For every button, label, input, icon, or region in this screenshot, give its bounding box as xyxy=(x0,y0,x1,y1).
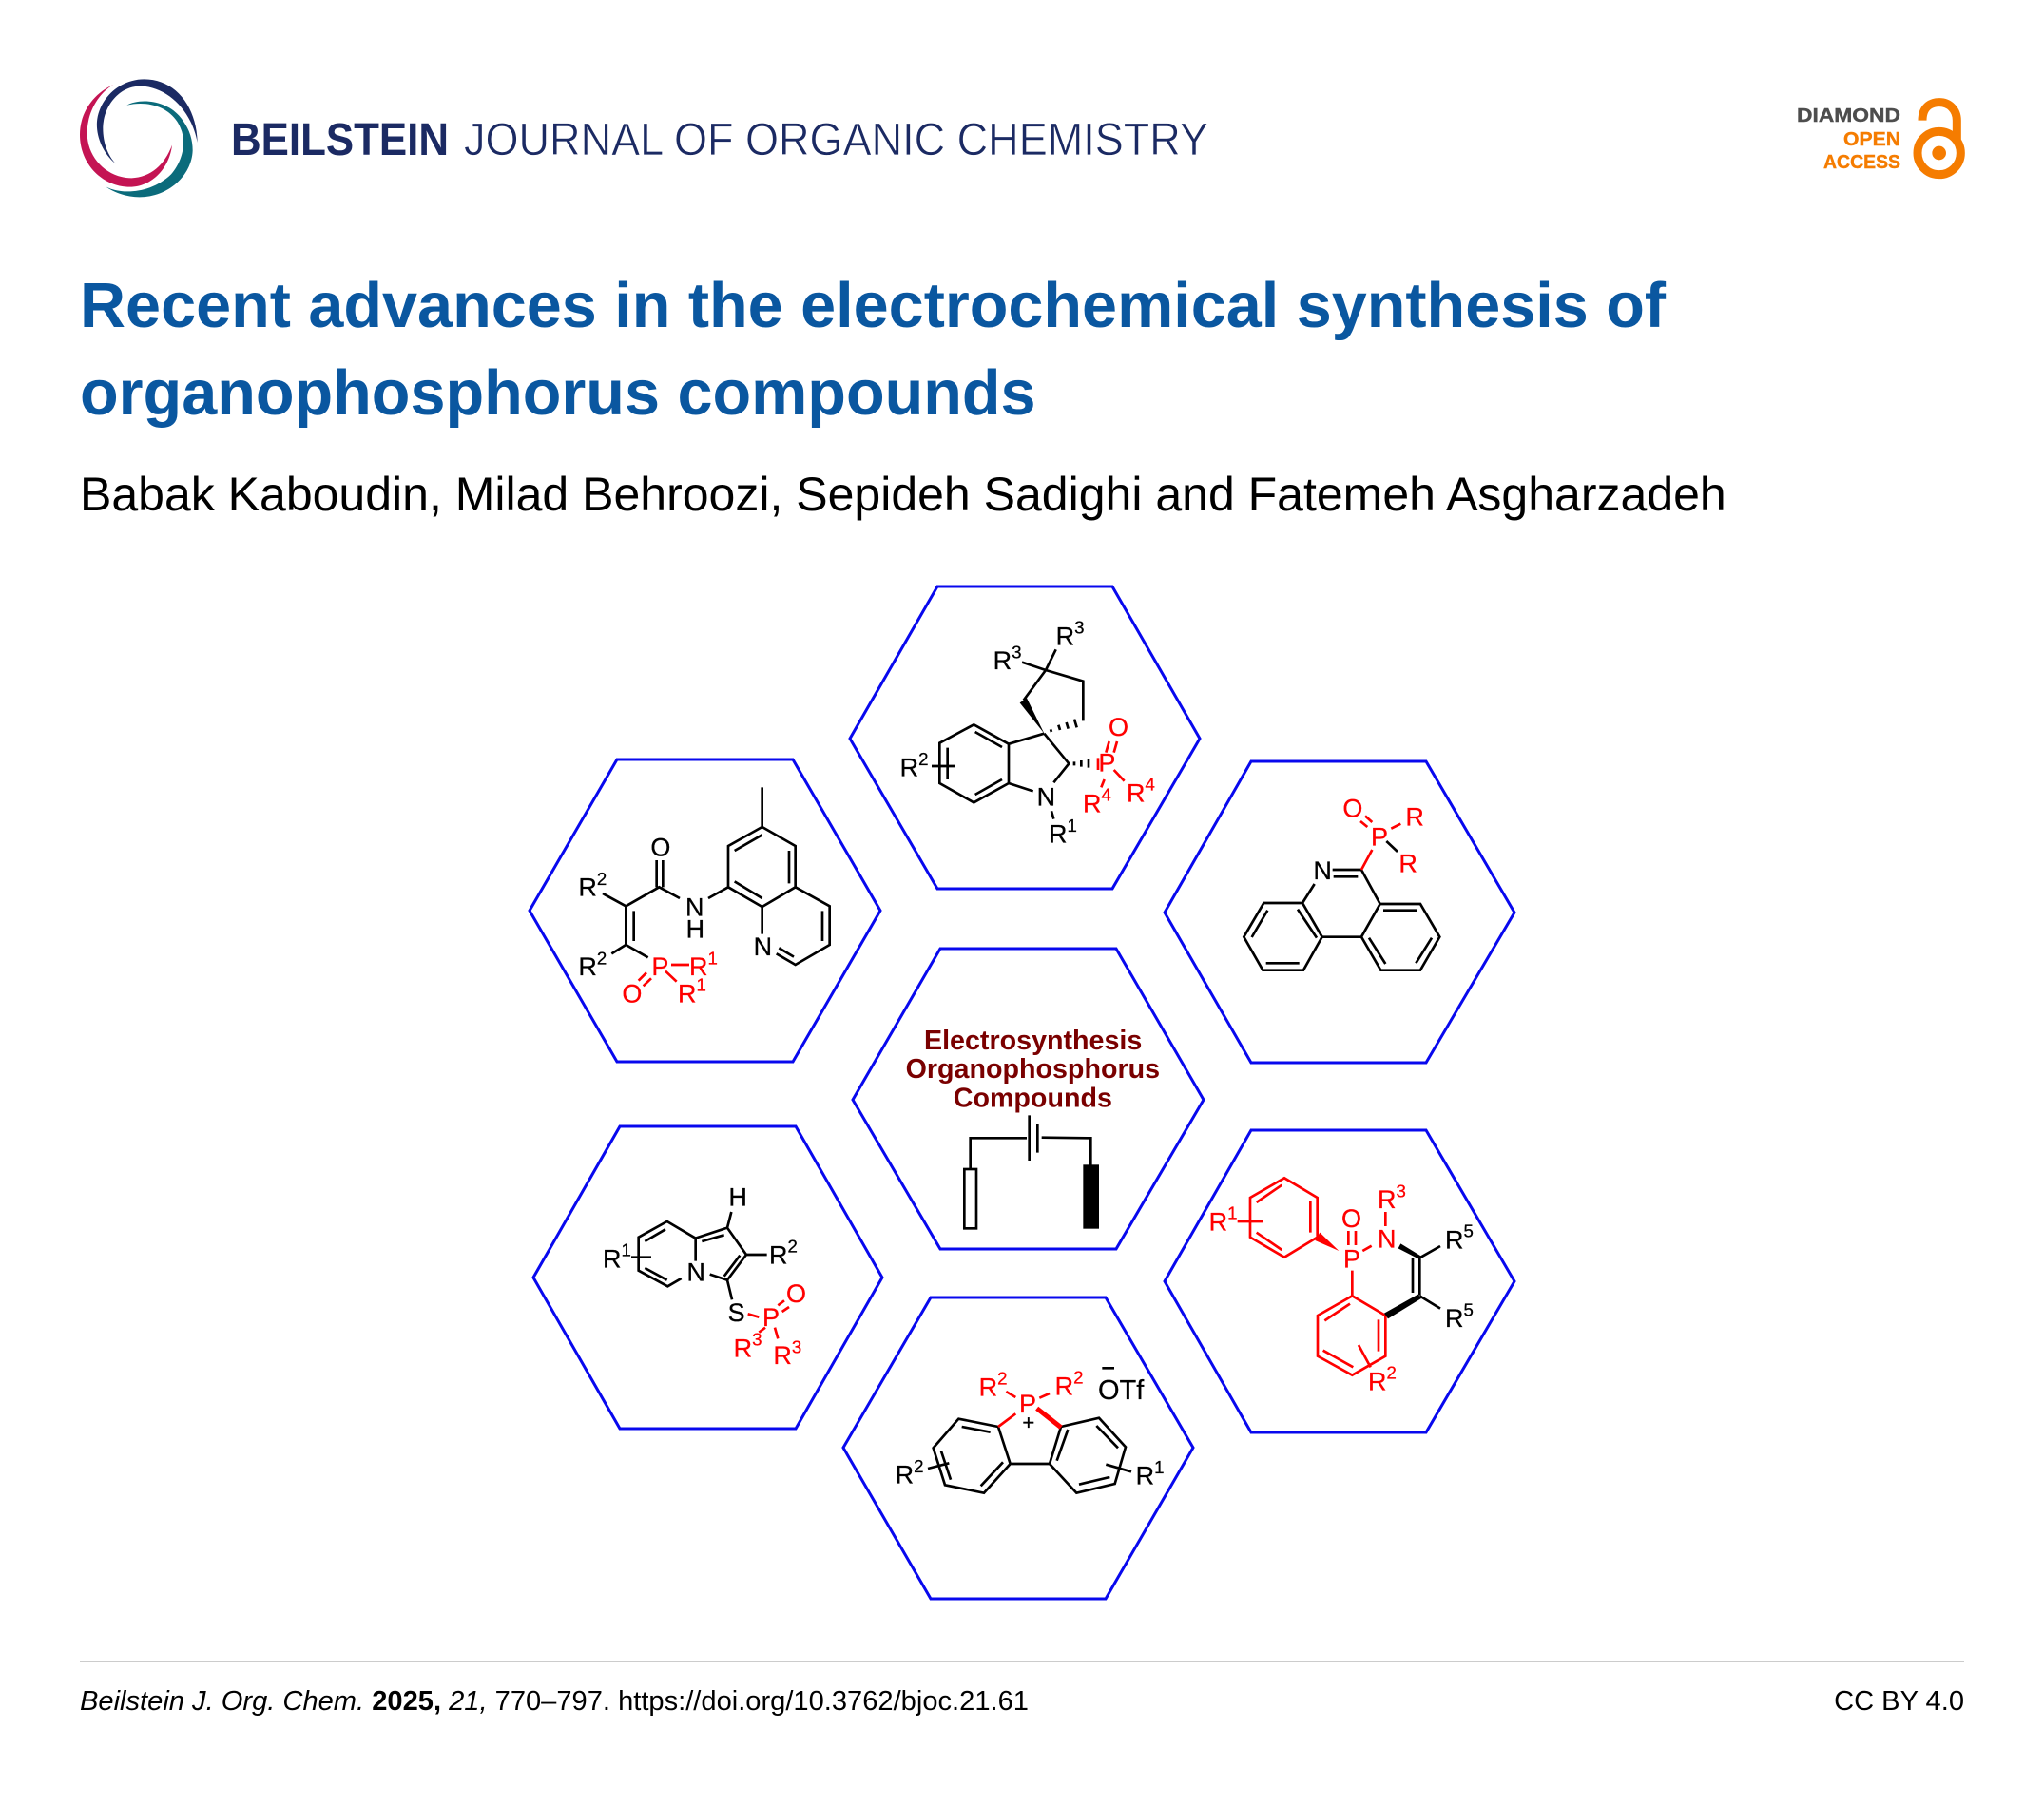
hexagon: upper right molecule xyxy=(1165,761,1514,1063)
molecule: phosphonium triflate: 2 xyxy=(997,1369,1008,1389)
molecule: phosphonium triflate: R xyxy=(979,1373,997,1401)
molecule: vinyl phosphine oxide quinoline amide: N xyxy=(685,893,704,921)
molecule: spiro indoline phosphine oxide: R xyxy=(900,754,918,782)
molecule: indolizine thiophosphate: 3 xyxy=(752,1330,762,1350)
molecule: phosphonium triflate: R xyxy=(1055,1372,1073,1400)
icon: electrolysis circuit with electrodes xyxy=(964,1115,1099,1229)
molecule: phosphaisoquinoline oxide xyxy=(1209,1178,1474,1395)
molecule: vinyl phosphine oxide quinoline amide: R xyxy=(689,952,707,981)
molecule: spiro indoline phosphine oxide: 2 xyxy=(918,749,929,769)
central heading xyxy=(906,1026,1160,1113)
journal name: BEILSTEIN xyxy=(231,115,449,165)
molecule: phosphaisoquinoline oxide: R xyxy=(1445,1225,1463,1254)
molecule: vinyl phosphine oxide quinoline amide xyxy=(578,787,830,1008)
molecule: indolizine thiophosphate: R xyxy=(603,1244,621,1273)
molecule: phenanthridine phosphine oxide xyxy=(1244,794,1439,970)
central heading and electrolysis cell xyxy=(906,1026,1160,1229)
molecule: phosphonium triflate: R xyxy=(1136,1462,1154,1490)
molecule: indolizine thiophosphate: P xyxy=(762,1303,780,1332)
molecule: phosphaisoquinoline oxide: 5 xyxy=(1463,1299,1474,1319)
diamond open access badge: ACCESS xyxy=(1823,151,1900,173)
molecule: phenanthridine phosphine oxide: P xyxy=(1371,822,1388,851)
diamond open access badge: DIAMOND xyxy=(1797,105,1900,126)
diamond open access badge: OPEN xyxy=(1843,128,1900,150)
footer rule xyxy=(80,1661,1964,1662)
molecule: phenanthridine phosphine oxide: O xyxy=(1342,794,1362,822)
hexagon: top molecule xyxy=(850,586,1200,889)
molecule: indolizine thiophosphate: R xyxy=(773,1341,792,1370)
molecule: phosphonium triflate: + xyxy=(1022,1411,1034,1434)
molecule: spiro indoline phosphine oxide: 4 xyxy=(1101,785,1111,805)
molecule: spiro indoline phosphine oxide: 4 xyxy=(1145,775,1155,795)
molecule: vinyl phosphine oxide quinoline amide: 2 xyxy=(597,869,607,889)
molecule: indolizine thiophosphate: H xyxy=(728,1182,747,1211)
molecule: indolizine thiophosphate xyxy=(603,1182,806,1370)
hexagon: bottom molecule xyxy=(843,1297,1193,1599)
diamond open access badge xyxy=(1797,103,1960,175)
molecule: spiro indoline phosphine oxide xyxy=(900,618,1155,849)
molecule: phosphonium triflate: P xyxy=(1019,1390,1036,1418)
licence: CC BY 4.0 xyxy=(1834,1686,1964,1717)
molecule: phosphaisoquinoline oxide: 2 xyxy=(1386,1363,1397,1383)
molecule: phosphaisoquinoline oxide: O xyxy=(1341,1204,1361,1233)
molecule: phosphaisoquinoline oxide: R xyxy=(1209,1207,1227,1236)
molecule: phosphonium triflate: R xyxy=(896,1461,914,1489)
molecule: spiro indoline phosphine oxide: O xyxy=(1109,713,1128,741)
molecule: vinyl phosphine oxide quinoline amide: R xyxy=(578,952,597,981)
molecule: vinyl phosphine oxide quinoline amide: 2 xyxy=(597,948,607,968)
molecule: phosphonium triflate xyxy=(896,1368,1165,1493)
molecule: spiro indoline phosphine oxide: 3 xyxy=(1012,642,1022,662)
molecule: vinyl phosphine oxide quinoline amide: R xyxy=(578,874,597,902)
molecule: phosphonium triflate: 2 xyxy=(914,1456,924,1476)
molecule: indolizine thiophosphate: 1 xyxy=(621,1240,631,1260)
molecule: phenanthridine phosphine oxide: R xyxy=(1398,850,1417,878)
molecule: vinyl phosphine oxide quinoline amide: H xyxy=(686,915,704,944)
molecule: phosphaisoquinoline oxide: R xyxy=(1378,1185,1396,1214)
title: organophosphorus compounds xyxy=(80,358,1036,429)
molecule: spiro indoline phosphine oxide: R xyxy=(993,646,1012,675)
molecule: indolizine thiophosphate: 3 xyxy=(792,1336,801,1356)
molecule: vinyl phosphine oxide quinoline amide: 1 xyxy=(696,975,706,995)
molecule: phosphonium triflate: OTf xyxy=(1098,1375,1145,1406)
molecule: vinyl phosphine oxide quinoline amide: N xyxy=(754,932,772,961)
molecule: spiro indoline phosphine oxide: P xyxy=(1098,749,1115,778)
molecule: phosphaisoquinoline oxide: 1 xyxy=(1227,1203,1238,1223)
molecule: indolizine thiophosphate: N xyxy=(686,1258,705,1287)
molecule: vinyl phosphine oxide quinoline amide: 1 xyxy=(707,948,718,968)
journal name: JOURNAL OF ORGANIC CHEMISTRY xyxy=(464,115,1208,165)
hexagon: lower left molecule xyxy=(533,1126,882,1429)
molecule: phosphaisoquinoline oxide: 3 xyxy=(1396,1181,1406,1201)
molecule: phenanthridine phosphine oxide: N xyxy=(1313,856,1332,885)
title: Recent advances in the electrochemical synthesis of xyxy=(80,271,1667,341)
molecule: spiro indoline phosphine oxide: 1 xyxy=(1067,816,1077,836)
molecule: phosphonium triflate: 1 xyxy=(1154,1457,1165,1477)
molecule: spiro indoline phosphine oxide: 3 xyxy=(1074,618,1085,638)
molecule: indolizine thiophosphate: 2 xyxy=(787,1237,798,1257)
molecule: phosphaisoquinoline oxide: R xyxy=(1368,1367,1386,1395)
hexagon: upper left molecule xyxy=(530,759,880,1062)
molecule: vinyl phosphine oxide quinoline amide: O xyxy=(622,979,642,1008)
molecule: indolizine thiophosphate: R xyxy=(769,1240,787,1269)
molecule: spiro indoline phosphine oxide: R xyxy=(1049,820,1067,849)
molecule: phenanthridine phosphine oxide: R xyxy=(1405,802,1424,831)
central heading: Organophosphorus xyxy=(906,1054,1160,1085)
molecule: indolizine thiophosphate: O xyxy=(786,1279,806,1308)
molecule: vinyl phosphine oxide quinoline amide: P xyxy=(651,952,668,981)
central heading: Electrosynthesis xyxy=(924,1026,1142,1056)
molecule: phosphaisoquinoline oxide: P xyxy=(1343,1244,1360,1273)
molecule: spiro indoline phosphine oxide: R xyxy=(1083,789,1101,817)
molecule: indolizine thiophosphate: R xyxy=(734,1334,752,1362)
central heading: Compounds xyxy=(954,1083,1112,1113)
molecule: vinyl phosphine oxide quinoline amide: O xyxy=(650,834,670,862)
molecule: indolizine thiophosphate: S xyxy=(728,1298,745,1327)
molecule: vinyl phosphine oxide quinoline amide: R xyxy=(678,979,696,1008)
molecule: phosphaisoquinoline oxide: N xyxy=(1378,1225,1396,1254)
molecule: phosphaisoquinoline oxide: 5 xyxy=(1463,1221,1474,1241)
title xyxy=(80,271,1667,429)
authors: Babak Kaboudin, Milad Behroozi, Sepideh Sadighi and Fatemeh Asgharzadeh xyxy=(80,468,1726,521)
citation: Beilstein J. Org. Chem. 2025, 21, 770–797. https://doi.org/10.3762/bjoc.21.61 xyxy=(80,1686,1029,1717)
hexagon: lower right molecule xyxy=(1165,1130,1514,1432)
icon: journal logo swirl xyxy=(80,79,198,197)
molecule: spiro indoline phosphine oxide: R xyxy=(1127,778,1145,807)
molecule: spiro indoline phosphine oxide: N xyxy=(1037,782,1055,811)
molecule: spiro indoline phosphine oxide: R xyxy=(1056,622,1074,650)
hexagon: centre xyxy=(853,949,1204,1249)
molecule: phosphonium triflate: 2 xyxy=(1073,1368,1084,1388)
molecule: phosphaisoquinoline oxide: R xyxy=(1445,1304,1463,1333)
icon: open padlock xyxy=(1918,103,1960,175)
